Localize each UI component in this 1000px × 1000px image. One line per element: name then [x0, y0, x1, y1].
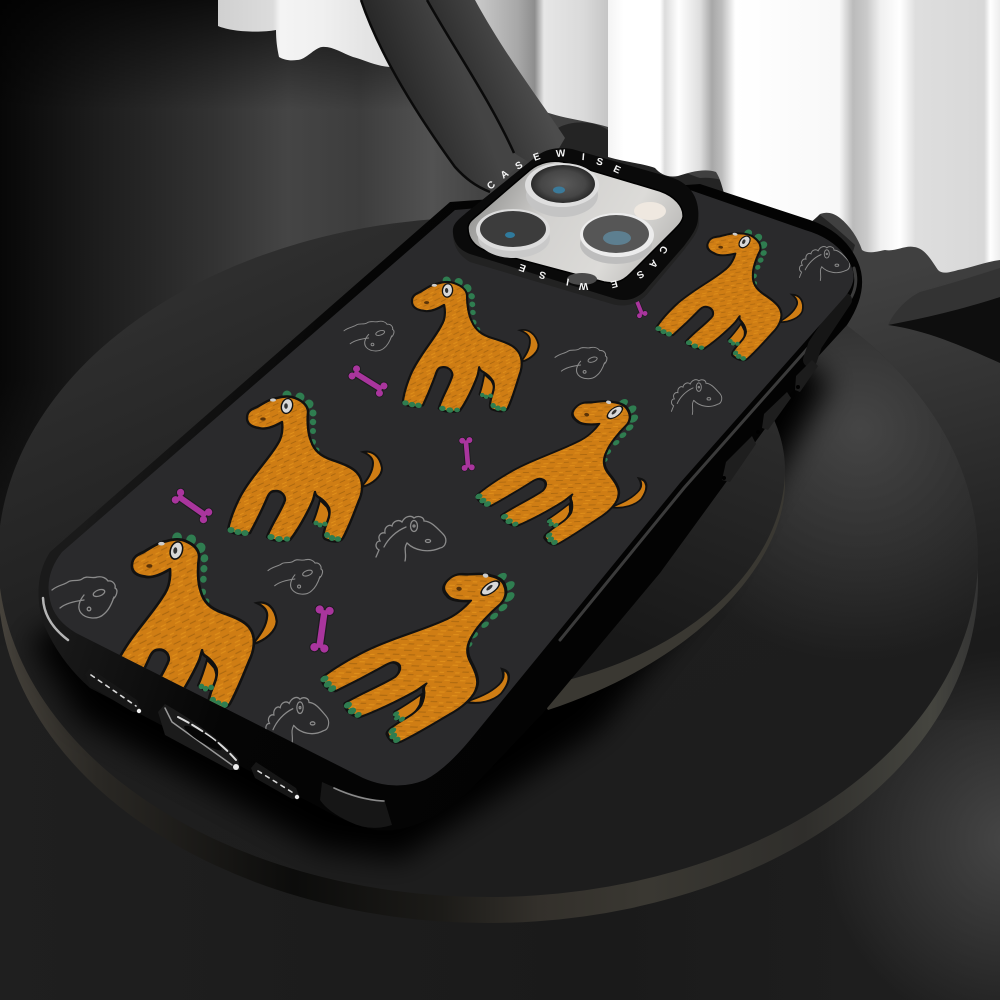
lens: right: [580, 213, 654, 264]
brand lettering: CASEWISE: [517, 244, 669, 291]
lens: left: [476, 209, 550, 258]
flash: [634, 202, 666, 220]
dinosaur: bottom left: [120, 532, 278, 708]
doodle: horse head 2: [555, 347, 607, 379]
doodle: horse head 3: [671, 380, 722, 414]
doodle: horse head 5: [376, 516, 446, 561]
corner bumper gloss: [320, 782, 392, 828]
phone case body: [38, 184, 862, 830]
dark wave reflections behind curtain: [555, 122, 855, 262]
doodle: horse head 7: [52, 577, 117, 618]
large round platform: [0, 217, 978, 923]
bone 4: [309, 604, 335, 654]
doodle: horse head 4: [799, 247, 850, 280]
doodle: horse head 6: [268, 559, 323, 594]
artwork on the case: [52, 217, 850, 764]
bone 1: [347, 363, 389, 399]
side buttons: [722, 360, 818, 482]
raised inner disc: [480, 290, 785, 710]
dark side object at right: [888, 268, 1000, 363]
dinosaur: top right: [655, 230, 804, 362]
lens: top: [525, 163, 599, 217]
brand lettering: [485, 148, 669, 291]
dinosaur: centre right: [475, 399, 648, 546]
curtain: small left piece: [218, 0, 390, 67]
arch stand behind the phone: [361, 0, 565, 192]
dinosaur: centre left: [227, 390, 382, 542]
camera module: [453, 148, 699, 306]
dinosaur: bottom large: [320, 572, 515, 744]
bone 3: [171, 488, 213, 524]
doodle: horse head 8: [266, 698, 329, 744]
sensor: [567, 273, 597, 285]
dinosaur: top centre: [402, 276, 540, 413]
right speaker: [251, 762, 300, 799]
bottom ports: [85, 668, 300, 799]
curtain: back section: [470, 0, 620, 135]
charging port: [158, 704, 240, 770]
brand lettering: CASEWISE: [485, 148, 622, 192]
camera glass: [468, 161, 683, 283]
curtain: main drapery: [608, 0, 1000, 273]
bone 5: [635, 301, 648, 318]
case back surface: [48, 190, 854, 786]
case highlights: [43, 268, 856, 801]
doodle: horse head 1: [344, 321, 394, 351]
shadow under phone: [30, 300, 830, 860]
bone 2: [459, 436, 475, 472]
left speaker: [85, 668, 141, 713]
